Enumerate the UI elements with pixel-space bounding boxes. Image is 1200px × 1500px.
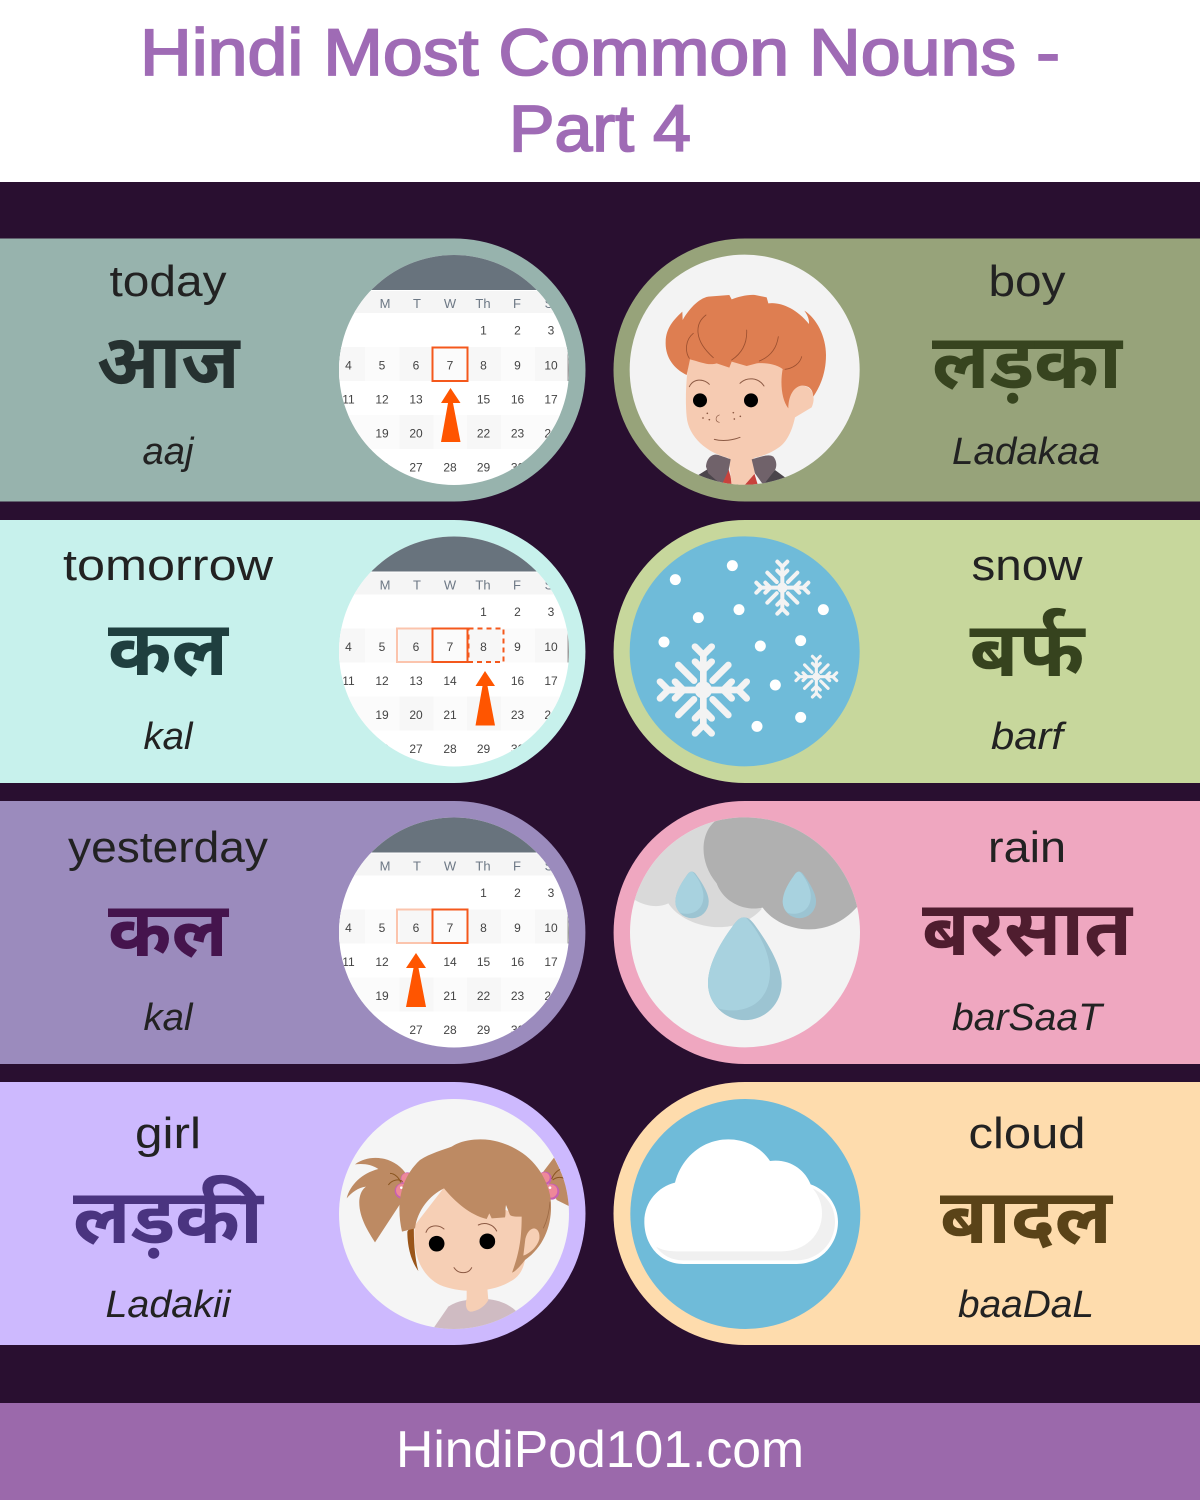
icon: calendar with yesterday highlighted: 23 (511, 989, 524, 1003)
icon: calendar with tomorrow highlighted: W (444, 578, 457, 592)
icon: calendar with tomorrow highlighted: 14 (443, 674, 457, 688)
icon: calendar with today highlighted: 27 (409, 460, 423, 474)
icon: calendar with today highlighted: 22 (477, 426, 490, 440)
panel: girl (0, 1082, 586, 1345)
romanization: aaj: aaj (142, 431, 195, 473)
icon: calendar with tomorrow highlighted: 5 (379, 640, 386, 654)
icon: calendar with today highlighted: 4 (345, 358, 352, 372)
icon: calendar with tomorrow highlighted: 27 (409, 742, 423, 756)
hindi word: kal: कल (108, 607, 230, 692)
icon: calendar with today highlighted: 12 (375, 392, 389, 406)
icon: calendar with yesterday highlighted: 30 (511, 1023, 524, 1037)
icon: calendar with tomorrow highlighted: 4 (345, 640, 352, 654)
romanization: Ladakii: Ladakii (106, 1284, 232, 1326)
english word: snow: snow (972, 541, 1083, 590)
icon: calendar with today highlighted: 10 (544, 358, 558, 372)
icon: calendar with today highlighted: 2 (514, 324, 521, 338)
icon: calendar with tomorrow highlighted: 6 (413, 640, 420, 654)
icon: calendar with yesterday highlighted: 27 (409, 1023, 423, 1037)
icon: rain cloud and drops (630, 817, 860, 1048)
icon: calendar with today highlighted: T (413, 296, 421, 311)
icon: calendar with yesterday highlighted: 26 (375, 1023, 389, 1037)
icon: calendar with tomorrow highlighted (331, 536, 570, 767)
icon: calendar with yesterday highlighted: 17 (544, 955, 558, 969)
icon: calendar with yesterday highlighted: 12 (375, 955, 389, 969)
romanization: kal: kal (144, 997, 194, 1039)
icon: calendar with yesterday highlighted (331, 817, 570, 1048)
panel: tomorrow (0, 520, 585, 783)
icon: calendar with yesterday highlighted: S (545, 858, 554, 874)
icon: calendar with yesterday highlighted: 6 (413, 921, 420, 935)
icon: calendar with today highlighted: 6 (413, 358, 420, 372)
icon: calendar with today highlighted: 15 (477, 392, 490, 406)
icon: calendar with tomorrow highlighted: M (380, 578, 390, 592)
romanization: baaDaL: baaDaL (958, 1284, 1094, 1326)
icon: calendar with yesterday highlighted: 1 (480, 886, 487, 900)
romanization: barSaaT: barSaaT (952, 997, 1105, 1039)
icon: calendar with tomorrow highlighted: 13 (409, 674, 423, 688)
hindi word: aaj: आज (96, 320, 241, 405)
icon: calendar with today highlighted: 5 (379, 358, 386, 372)
icon: calendar with today highlighted: F (513, 296, 521, 311)
icon: calendar with today highlighted: 11 (342, 392, 355, 406)
english word: girl: girl (135, 1109, 201, 1158)
icon: calendar with yesterday highlighted: 15 (477, 955, 490, 969)
icon: calendar with today highlighted: M (380, 296, 390, 311)
english word: today: today (110, 257, 226, 306)
icon: calendar with yesterday highlighted: Th (475, 858, 491, 874)
icon: calendar with today highlighted: 8 (480, 358, 487, 372)
title band (0, 0, 1200, 182)
icon: calendar with tomorrow highlighted: F (513, 578, 521, 592)
icon: calendar with tomorrow highlighted: 26 (375, 742, 389, 756)
english word: yesterday: yesterday (68, 823, 268, 872)
icon: calendar with today highlighted: 30 (511, 460, 524, 474)
icon: calendar with yesterday highlighted: 5 (379, 921, 386, 935)
title line 1: Hindi Most Common Nouns - (140, 15, 1060, 89)
icon: cloud (630, 1099, 860, 1329)
icon: calendar with yesterday highlighted: 4 (345, 921, 352, 935)
icon: calendar with tomorrow highlighted: 29 (477, 742, 490, 756)
icon: calendar with today highlighted: Th (475, 296, 491, 311)
icon: boy face (630, 255, 860, 487)
icon: calendar with today highlighted: W (444, 296, 457, 311)
icon: calendar with yesterday highlighted: 29 (477, 1023, 490, 1037)
icon: snowflakes (630, 536, 860, 766)
icon: calendar with tomorrow highlighted: 3 (548, 605, 555, 619)
english word: tomorrow: tomorrow (63, 541, 273, 590)
icon: calendar with tomorrow highlighted: 16 (511, 674, 524, 688)
icon: calendar with today highlighted: 1 (480, 324, 487, 338)
icon: calendar with tomorrow highlighted: 17 (544, 674, 558, 688)
icon: calendar with tomorrow highlighted: 11 (342, 674, 355, 688)
icon: calendar with yesterday highlighted: 8 (480, 921, 487, 935)
icon: calendar with yesterday highlighted: W (444, 858, 457, 874)
hindi word: baadal: बादल (940, 1175, 1114, 1260)
icon: calendar with tomorrow highlighted: 9 (514, 640, 521, 654)
icon: calendar with tomorrow highlighted: S (545, 578, 554, 592)
icon: calendar with tomorrow highlighted: Th (475, 578, 491, 592)
icon: calendar with tomorrow highlighted: 24 (544, 708, 558, 722)
english word: rain: rain (988, 823, 1066, 872)
icon: calendar with yesterday highlighted: 24 (544, 989, 558, 1003)
icon: calendar with today highlighted: 9 (514, 358, 521, 372)
icon: calendar with yesterday highlighted: F (513, 858, 521, 874)
icon: calendar with yesterday highlighted: 28 (443, 1023, 457, 1037)
hindi word: barsaat: बरसात (922, 887, 1134, 972)
english word: boy: boy (988, 257, 1066, 306)
romanization: barf: barf (991, 716, 1067, 758)
panel: rain (614, 801, 1200, 1064)
icon: calendar with today highlighted: 20 (409, 426, 423, 440)
icon: calendar with yesterday highlighted: 9 (514, 921, 521, 935)
icon: calendar with yesterday highlighted: 11 (342, 955, 355, 969)
icon: calendar with today highlighted: 19 (375, 426, 389, 440)
panel: snow (614, 520, 1200, 783)
icon: calendar with yesterday highlighted: 16 (511, 955, 524, 969)
icon: calendar with today highlighted: 13 (409, 392, 423, 406)
panel: today (0, 238, 586, 502)
icon: calendar with yesterday highlighted: 14 (443, 955, 457, 969)
panel: cloud (614, 1082, 1200, 1345)
icon: calendar with tomorrow highlighted: 2 (514, 605, 521, 619)
romanization: kal: kal (144, 716, 194, 758)
icon: calendar with yesterday highlighted: 3 (548, 886, 555, 900)
panel: yesterday (0, 801, 585, 1064)
icon: calendar with today highlighted: 7 (447, 358, 454, 372)
footer website: HindiPod101.com (396, 1421, 804, 1479)
icon: calendar with tomorrow highlighted: 8 (480, 640, 487, 654)
hindi word: barf: बर्फ (970, 607, 1086, 693)
icon: calendar with yesterday highlighted: M (380, 858, 390, 874)
title line 2: Part 4 (509, 91, 691, 165)
icon: calendar with yesterday highlighted: 2 (514, 886, 521, 900)
icon: calendar with yesterday highlighted: 21 (443, 989, 457, 1003)
icon: calendar with today highlighted: 26 (375, 460, 389, 474)
icon: calendar with tomorrow highlighted: 23 (511, 708, 524, 722)
icon: calendar with yesterday highlighted: T (413, 858, 421, 874)
icon: calendar with yesterday highlighted: 19 (375, 989, 389, 1003)
icon: calendar with today highlighted: 28 (443, 460, 457, 474)
icon: girl face (339, 1099, 570, 1332)
panel: boy (614, 238, 1200, 502)
icon: calendar with yesterday highlighted: 7 (447, 921, 454, 935)
hindi word: ladakii: लड़की (73, 1174, 265, 1260)
icon: calendar with yesterday highlighted: 10 (544, 921, 558, 935)
icon: calendar with tomorrow highlighted: 12 (375, 674, 389, 688)
icon: calendar with tomorrow highlighted: 10 (544, 640, 558, 654)
icon: calendar with today highlighted: 23 (511, 426, 524, 440)
icon: calendar with tomorrow highlighted: 28 (443, 742, 457, 756)
hindi word: kal: कल (108, 888, 230, 973)
icon: calendar with tomorrow highlighted: T (413, 578, 421, 592)
footer band (0, 1403, 1200, 1500)
icon: calendar with tomorrow highlighted: 20 (409, 708, 423, 722)
english word: cloud: cloud (968, 1109, 1086, 1158)
icon: calendar with tomorrow highlighted: 30 (511, 742, 524, 756)
icon: calendar with yesterday highlighted: 22 (477, 989, 490, 1003)
icon: calendar with today highlighted: 16 (511, 392, 524, 406)
icon: calendar with tomorrow highlighted: 1 (480, 605, 487, 619)
icon: calendar with today highlighted: 17 (544, 392, 558, 406)
icon: calendar with tomorrow highlighted: 7 (447, 640, 454, 654)
hindi word: ladakaa: लड़का (932, 320, 1124, 405)
icon: calendar with today highlighted (331, 255, 570, 485)
icon: calendar with today highlighted: 3 (548, 324, 555, 338)
icon: calendar with tomorrow highlighted: 21 (443, 708, 457, 722)
romanization: Ladakaa: Ladakaa (952, 431, 1100, 473)
icon: calendar with today highlighted: 24 (544, 426, 558, 440)
icon: calendar with today highlighted: 29 (477, 460, 490, 474)
icon: calendar with tomorrow highlighted: 19 (375, 708, 389, 722)
icon: calendar with today highlighted: S (545, 296, 554, 311)
